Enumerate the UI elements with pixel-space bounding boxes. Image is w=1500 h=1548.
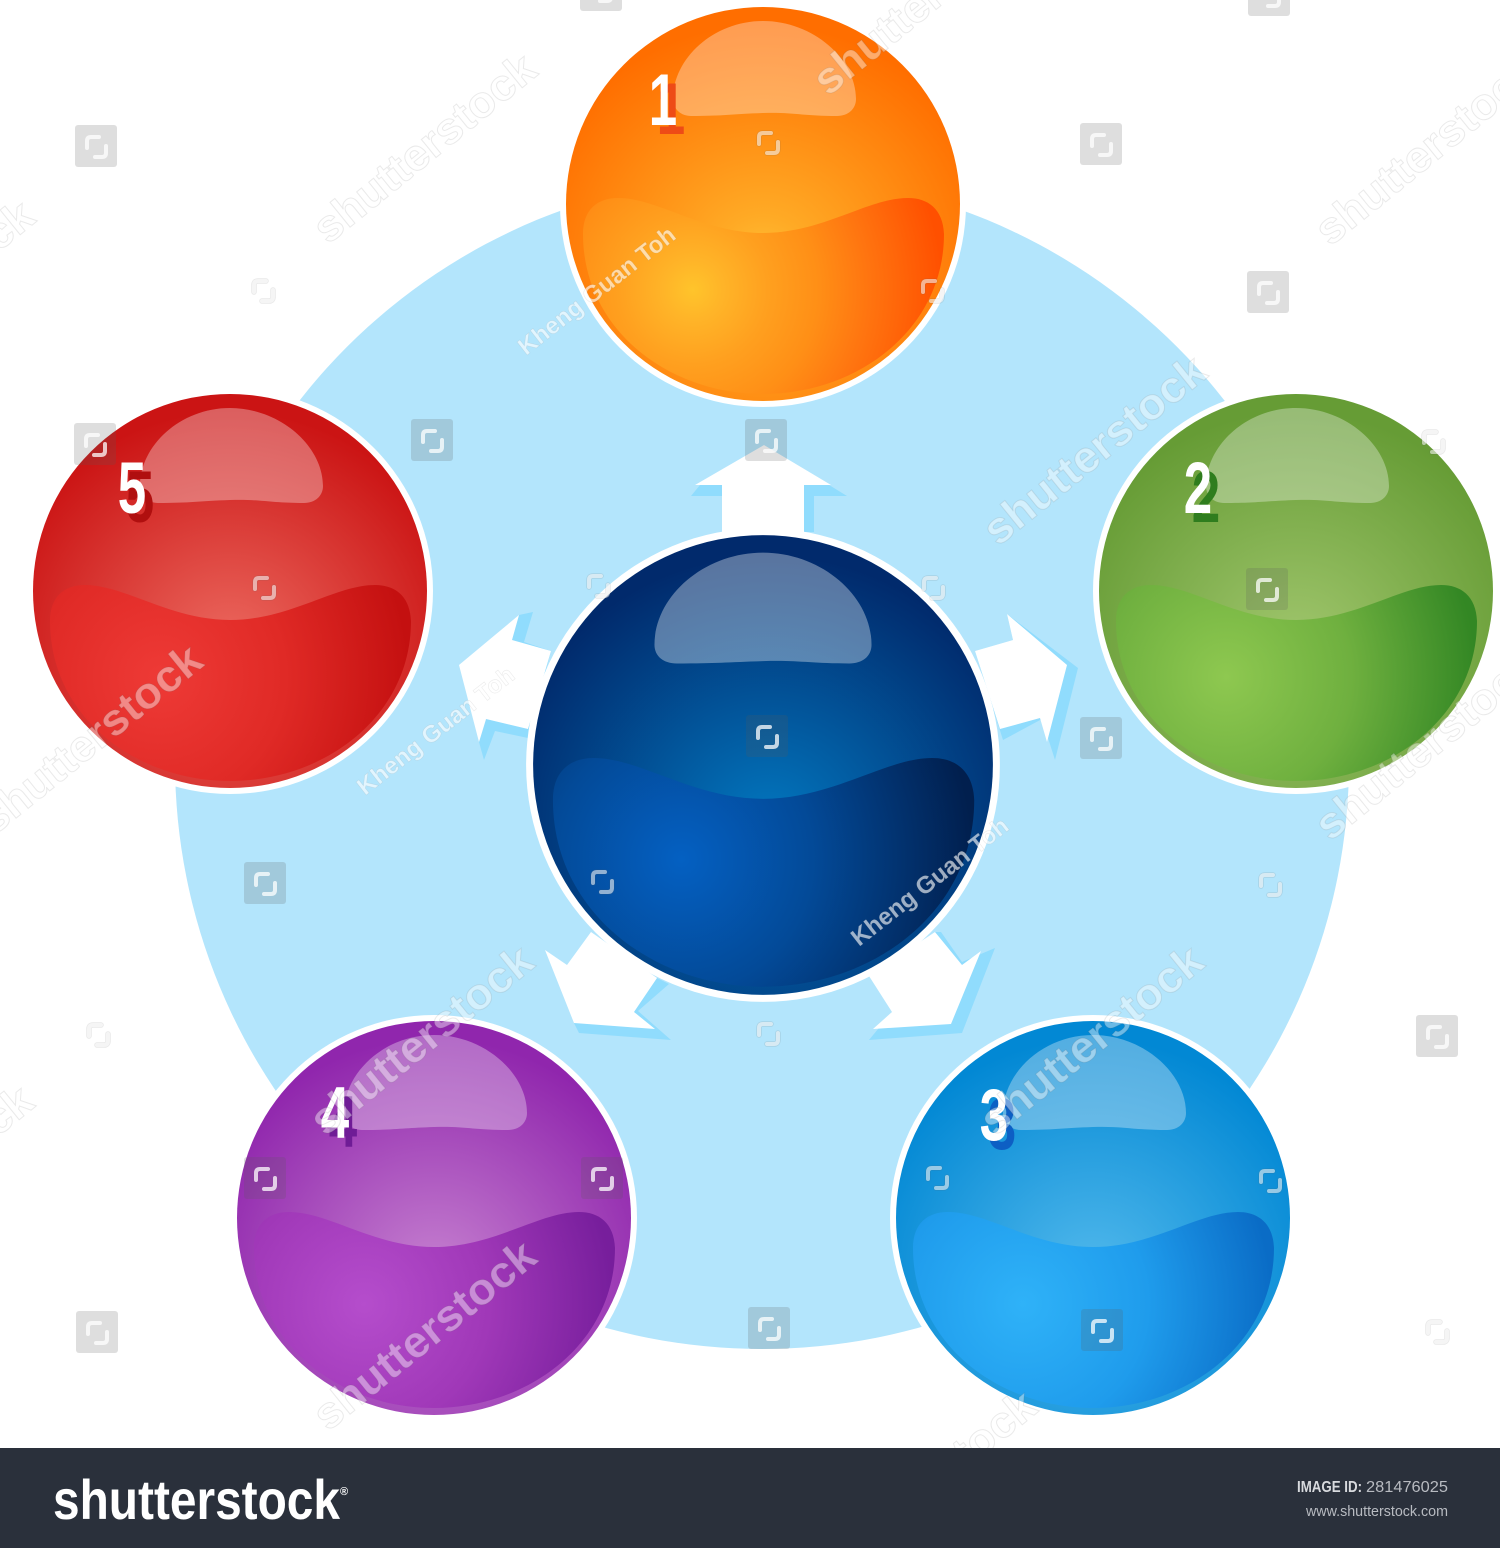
number 5: 5	[118, 448, 146, 529]
number 3: 3	[988, 1084, 1016, 1165]
website: www.shutterstock.com	[1305, 1503, 1448, 1520]
author credits: Kheng Guan Toh	[513, 221, 681, 361]
center sphere: navy	[526, 528, 1000, 1002]
sphere 1: orange	[560, 1, 966, 407]
watermarks: shutterstock	[973, 345, 1216, 555]
arrow: up	[691, 445, 847, 532]
arrow: left	[459, 612, 551, 760]
footer bar	[0, 1448, 1500, 1548]
author credits: Kheng Guan Toh	[846, 812, 1014, 952]
arrow: right	[975, 614, 1078, 760]
sphere 4: purple	[231, 1015, 637, 1421]
watermarks: shutterstock	[303, 43, 546, 253]
number 3: 3	[980, 1075, 1008, 1156]
number 2: 2	[1184, 448, 1212, 529]
footer logo: ®	[340, 1486, 348, 1498]
watermarks: shutterstock	[970, 935, 1213, 1145]
sphere 3: blue	[890, 1015, 1296, 1421]
arrow: lower right	[869, 932, 995, 1040]
number 4: 4	[329, 1082, 357, 1163]
number 1: 1	[657, 69, 685, 150]
footer logo: shutterstock	[53, 1468, 341, 1531]
background circle	[175, 175, 1349, 1349]
arrow: lower left	[545, 932, 671, 1040]
watermarks: shutterstock	[300, 935, 543, 1145]
author credits: Kheng Guan Toh	[352, 661, 520, 801]
author credits	[352, 221, 1014, 952]
image id: 281476025	[1366, 1479, 1448, 1496]
sphere 2: green	[1093, 388, 1499, 794]
image id: IMAGE ID:	[1297, 1479, 1362, 1496]
sphere 5: red	[27, 388, 433, 794]
number 5: 5	[126, 457, 154, 538]
number 4: 4	[321, 1073, 349, 1154]
watermarks: shutterstock	[303, 1230, 546, 1440]
number 1: 1	[649, 60, 677, 141]
number 2: 2	[1192, 457, 1220, 538]
